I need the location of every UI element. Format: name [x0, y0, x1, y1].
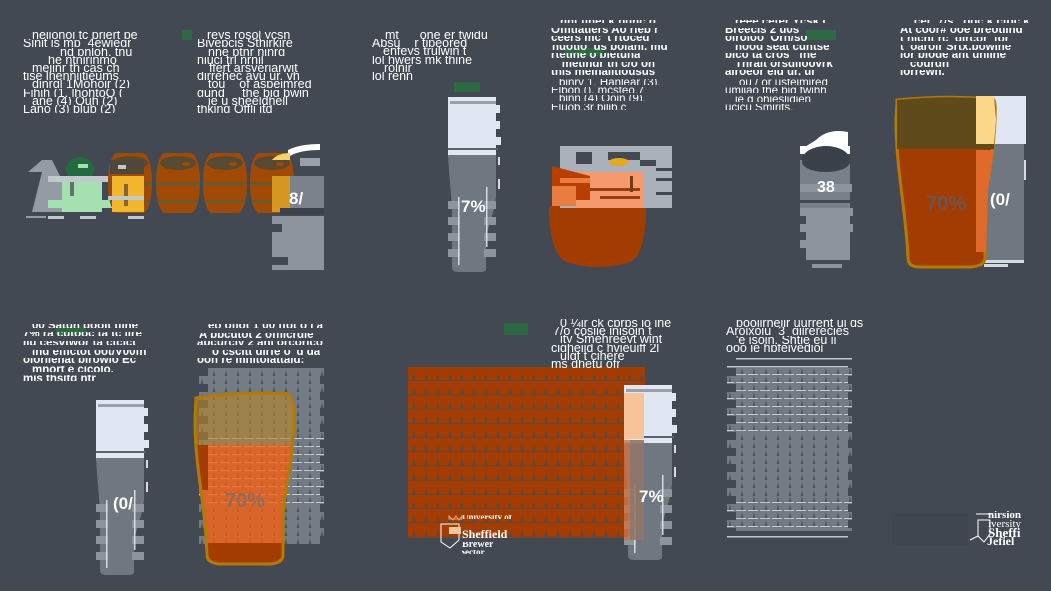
text block: panel 1 — [23, 31, 138, 113]
panel 8: grey icon grid behind pint — [199, 368, 324, 544]
icon: amber keg — [108, 153, 152, 213]
text block: panel 2 — [197, 31, 312, 113]
icon: brown keg — [250, 153, 294, 213]
text block: panel 5 — [725, 20, 833, 110]
panel 9: pilsner glass — [624, 385, 677, 560]
icon: grey keg — [28, 160, 62, 212]
logo: faded shadow, right — [892, 513, 968, 545]
icon: green keg — [48, 157, 112, 212]
pilsner glass behind — [976, 96, 1026, 267]
percentage: panel 9 glass: 7% — [639, 487, 664, 506]
icon: brown keg — [156, 153, 200, 213]
panel 9: brown icon grid — [408, 367, 645, 538]
brown bowl — [549, 206, 646, 267]
panel 1: row of kegs — [26, 153, 294, 219]
panel 6: amber pint over pilsner — [896, 96, 1026, 267]
logo: university shield, left — [441, 516, 462, 548]
text block: panel 6 — [900, 20, 1030, 75]
orange overlap — [552, 166, 644, 208]
icon: brown keg — [203, 153, 247, 213]
panel 10: grey icon grid — [727, 358, 852, 538]
logo text: right — [987, 511, 1021, 546]
text block: panel 7 — [23, 324, 146, 381]
percentage: panel 8 pint: 70% — [225, 490, 265, 512]
icon: yellow keg cap — [609, 158, 629, 166]
panel 4: stacked keg and brown glass — [549, 146, 672, 267]
panel 8: amber pint glass — [190, 390, 300, 568]
text block: panel 8 — [197, 324, 323, 363]
panel 7: pilsner glass — [96, 400, 149, 575]
logo: university shield, right — [970, 514, 992, 542]
text block: panel 9 — [551, 319, 671, 368]
grey keg tiles — [560, 146, 672, 208]
green highlights behind text — [56, 30, 836, 335]
panel 5: grey pint mug — [800, 131, 853, 268]
panel 2: dark pint glass — [272, 144, 324, 270]
panel 3: pilsner glass — [448, 97, 501, 272]
text block: panel 4 — [551, 20, 668, 110]
amber pint — [896, 97, 995, 267]
percentage: panel 7 glass: (0/ — [113, 494, 133, 513]
percentage: panel 6 pint: 70% — [926, 193, 966, 215]
logo text: left — [462, 515, 512, 554]
text block: panel 3 — [372, 31, 488, 80]
percentage: panel 5 mug: 38 — [817, 179, 835, 196]
percentage: panel 3 glass: 7% — [461, 197, 486, 216]
text block: panel 10 — [726, 319, 863, 352]
